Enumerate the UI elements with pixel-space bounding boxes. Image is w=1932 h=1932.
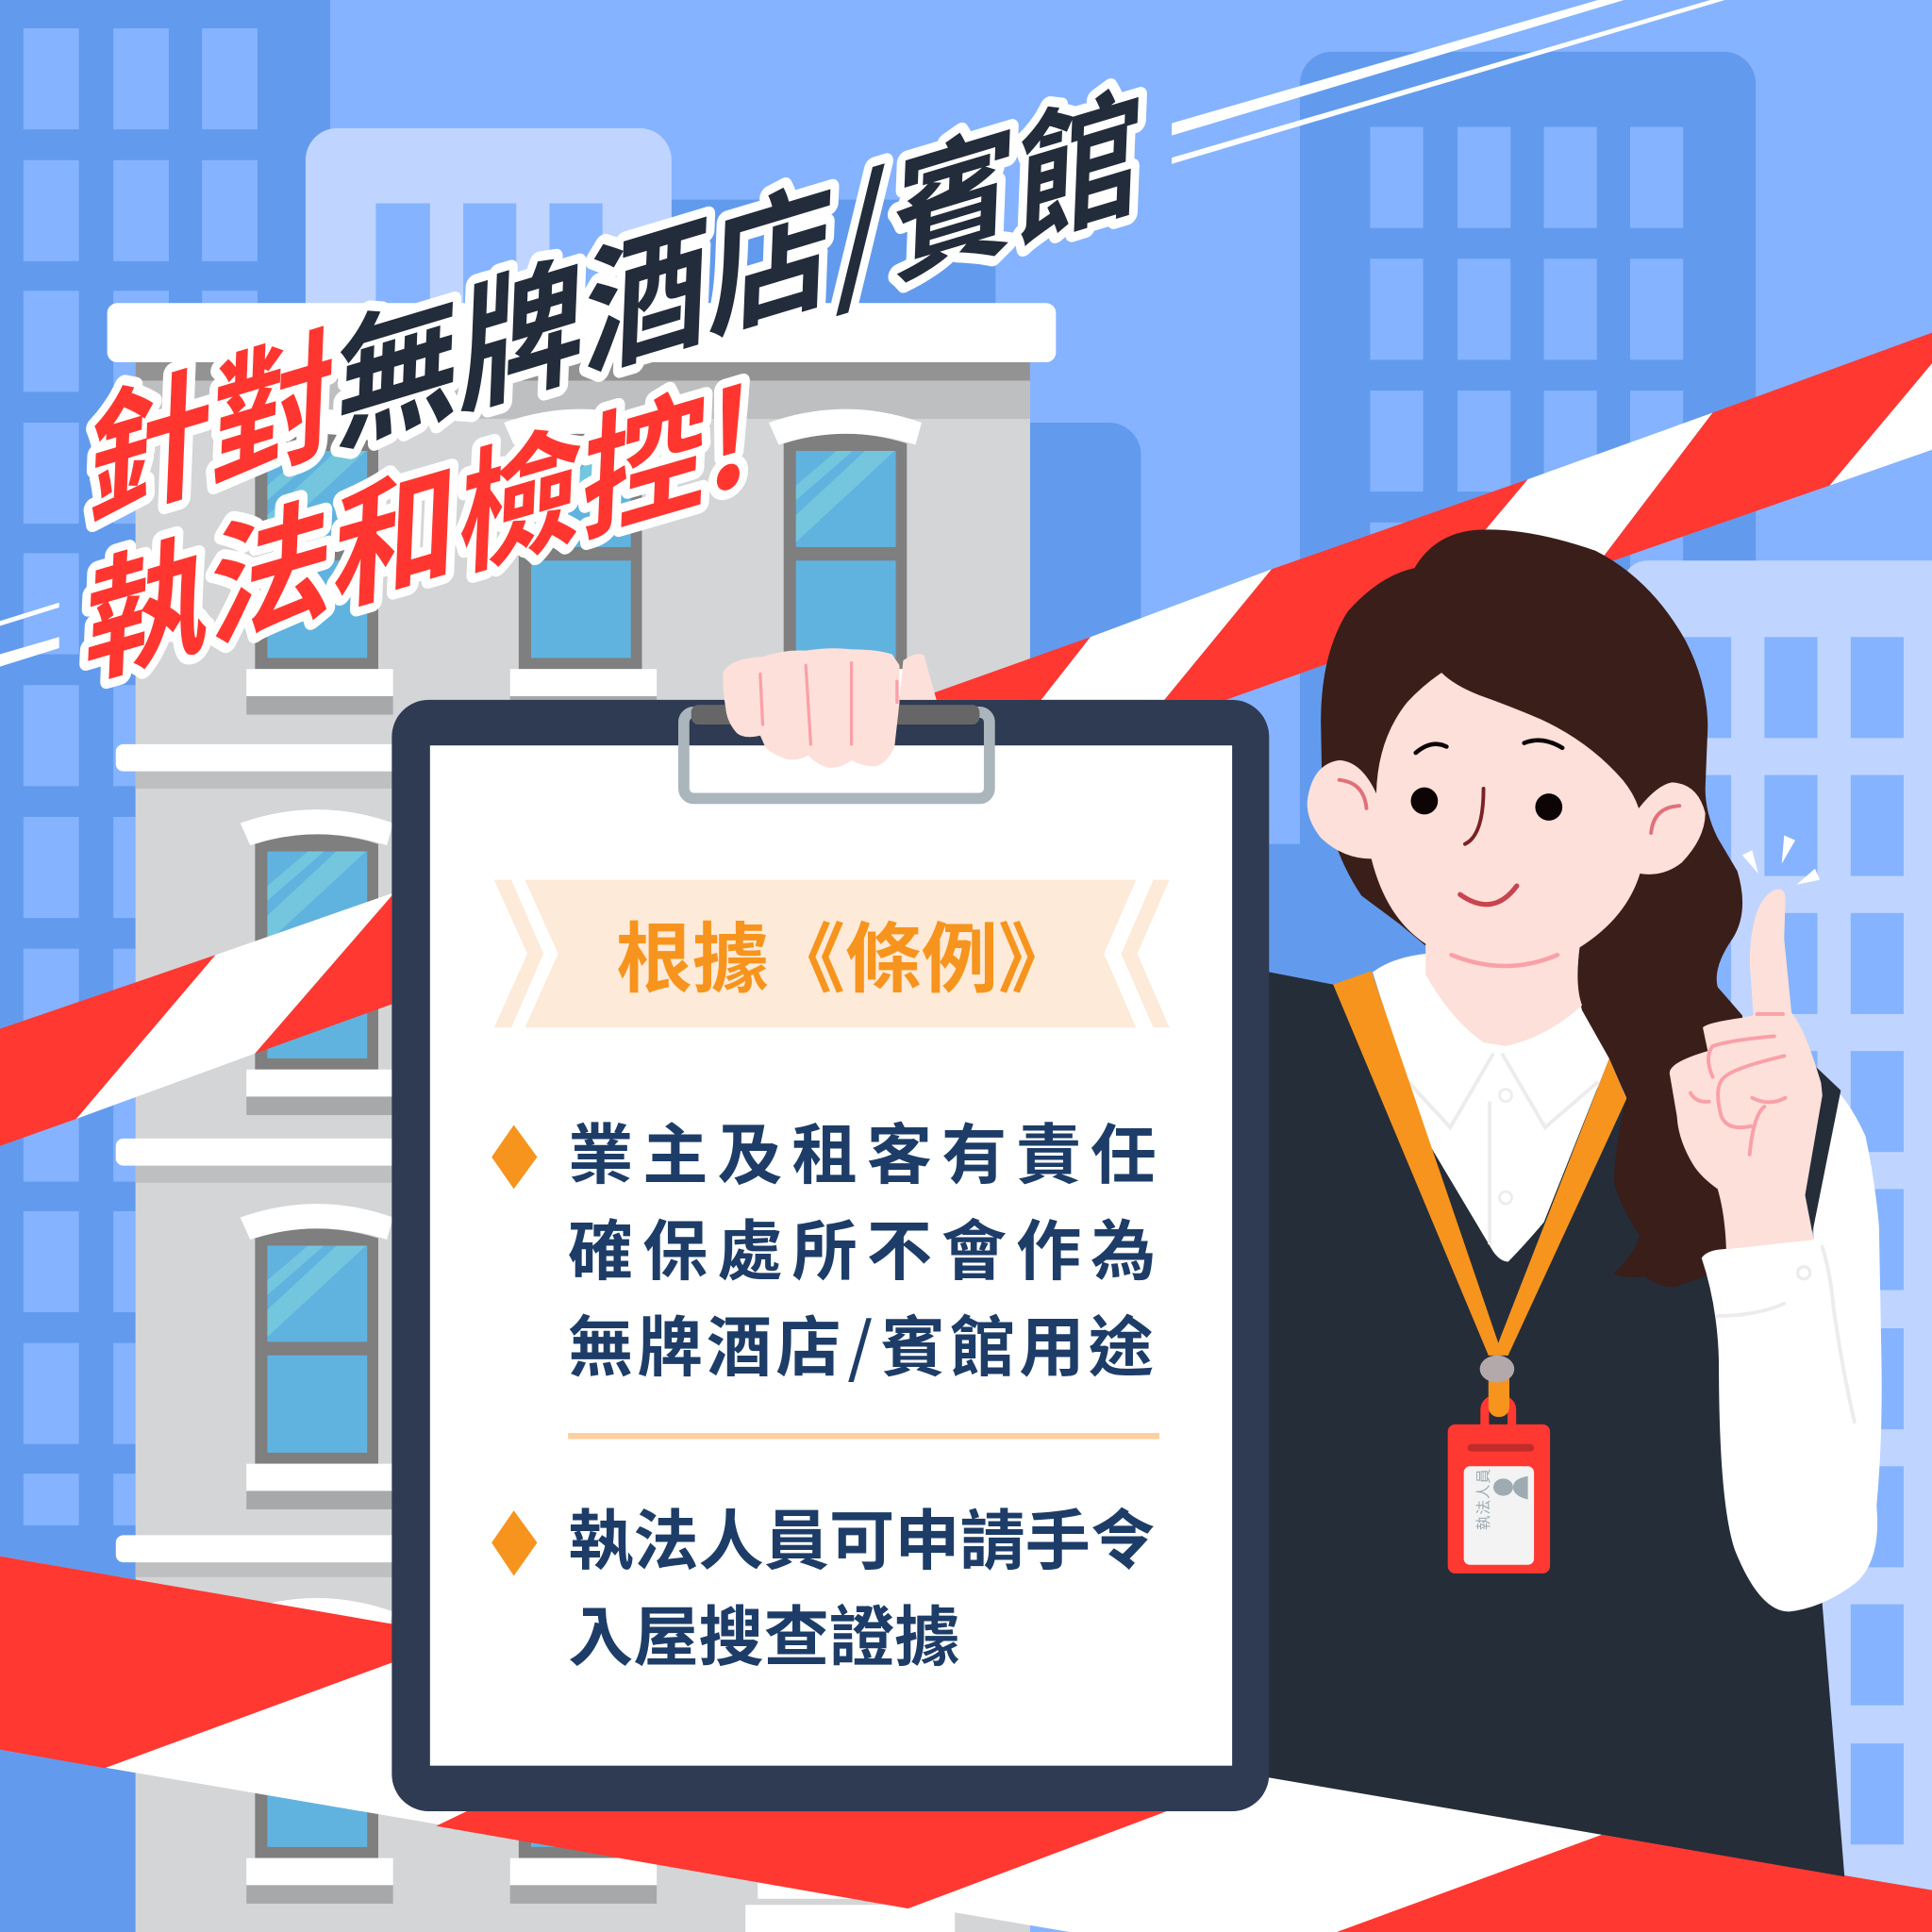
- person: vest edge by arm: [1805, 1067, 1840, 1239]
- bullet one: [491, 1103, 1165, 1389]
- caution tape: top right: [914, 333, 1932, 700]
- hand gripping clipboard: [723, 648, 937, 768]
- grey main building: [108, 303, 1056, 1932]
- bullet two: 執法人員可申請手令: [568, 1488, 1156, 1582]
- caution tape: middle left: [0, 893, 391, 1146]
- clipboard: [391, 700, 1269, 1811]
- background: right light tower: [1623, 560, 1932, 1932]
- person: shirt: [1373, 954, 1609, 1261]
- person: lanyard: [1333, 971, 1626, 1356]
- background: centre towers: [306, 128, 1141, 792]
- banner: 根據《條例》: 根據《條例》: [616, 898, 1074, 1008]
- bullet one: 無牌酒店/賓館用途: [568, 1294, 1158, 1389]
- id badge: 執法人員: [1475, 1469, 1492, 1530]
- person: vest: [1257, 970, 1844, 1876]
- background: left tower: [0, 0, 330, 1932]
- id badge: [1448, 1356, 1550, 1574]
- title line 2: 執法和檢控!: [81, 326, 758, 714]
- person: right sleeve: [1702, 1072, 1882, 1611]
- bullet two: 入屋搜查證據: [568, 1584, 959, 1678]
- speed lines: [0, 0, 1725, 667]
- sparkle near finger: [1742, 836, 1820, 885]
- person: hair: [1321, 529, 1756, 1287]
- background: right dark tower: [1269, 52, 1756, 1041]
- bullet two: [491, 1488, 1156, 1678]
- bullet one: 確保處所不會作為: [568, 1199, 1165, 1293]
- divider: [568, 1433, 1159, 1440]
- banner: 根據《條例》: [494, 880, 1170, 1027]
- caution tape: bottom: [0, 1557, 1932, 1932]
- bullet one: 業主及租客有責任: [568, 1103, 1165, 1197]
- person: face and neck: [1307, 673, 1706, 1046]
- title line 1: 針對無牌酒店/賓館: [83, 36, 1146, 558]
- person: pointing hand: [1670, 890, 1823, 1249]
